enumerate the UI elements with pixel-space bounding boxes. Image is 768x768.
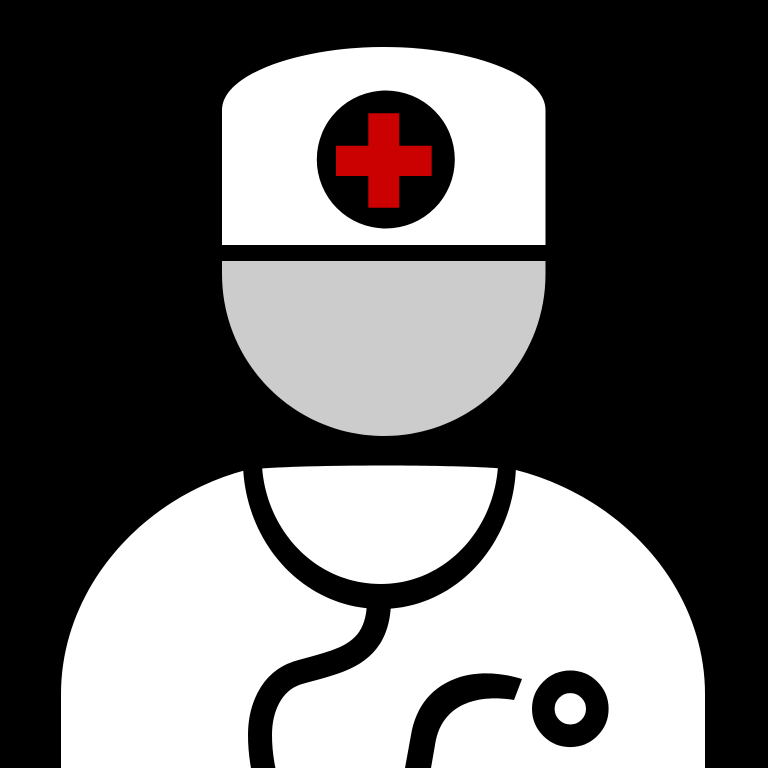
stethoscope right tube (405, 673, 522, 768)
stethoscope left tube (260, 600, 379, 768)
cap badge circle (317, 90, 455, 228)
stethoscope chest piece (543, 682, 597, 736)
red cross (336, 113, 432, 208)
icon: stethoscope (243, 466, 597, 768)
cap body (222, 47, 546, 245)
coat body (61, 466, 705, 768)
face (222, 261, 546, 436)
stethoscope neck loop (243, 466, 516, 609)
icon: doctor cap (222, 47, 546, 245)
